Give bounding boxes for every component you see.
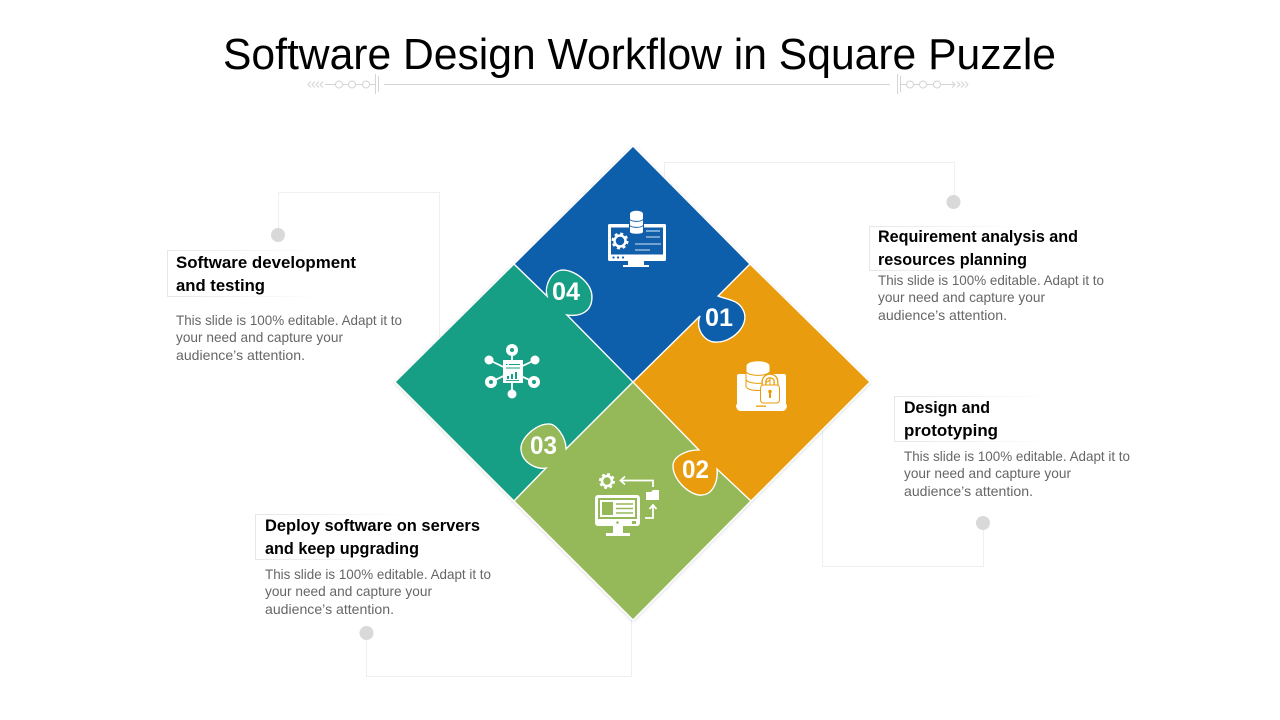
text block: design and prototyping — [894, 396, 1130, 499]
icon: monitor with database and gear — [608, 210, 666, 267]
heading: Software development — [176, 253, 356, 272]
text block: requirement analysis and resources planning — [870, 226, 1104, 323]
icon: document hub network — [484, 344, 540, 398]
icon: laptop with database and lock — [736, 361, 787, 411]
title: Software Design Workflow in Square Puzzle — [223, 30, 1056, 79]
body: This slide is 100% editable. Adapt it to — [265, 566, 491, 582]
puzzle piece: olive — [514, 382, 751, 620]
text block: deploy software on servers and keep upgrading — [256, 514, 491, 617]
heading line 2: and testing — [176, 276, 265, 295]
number 03: 03 — [530, 432, 557, 460]
square puzzle — [395, 146, 870, 620]
puzzle piece: blue — [514, 146, 750, 382]
title ornament — [308, 74, 968, 94]
heading: Design and — [904, 398, 990, 417]
body line 2: your need and capture your — [265, 583, 432, 599]
body line 2: your need and capture your — [904, 465, 1071, 481]
number 01: 01 — [705, 304, 733, 332]
connector: deploy software — [360, 620, 632, 676]
body: This slide is 100% editable. Adapt it to — [176, 312, 402, 328]
body line 2: your need and capture your — [878, 289, 1045, 305]
body line 3: audience’s attention. — [904, 483, 1033, 499]
connector: requirement analysis — [664, 162, 960, 209]
connector: software development — [271, 192, 440, 345]
text block: software development and testing — [168, 250, 402, 363]
body line 2: your need and capture your — [176, 329, 343, 345]
body: This slide is 100% editable. Adapt it to — [878, 272, 1104, 288]
number 04: 04 — [552, 278, 580, 306]
heading: Deploy software on servers — [265, 516, 480, 535]
body line 3: audience’s attention. — [878, 307, 1007, 323]
heading: Requirement analysis and — [878, 227, 1078, 246]
connector: design and prototyping — [822, 430, 990, 566]
puzzle piece: orange — [633, 264, 870, 501]
number 02: 02 — [682, 456, 709, 484]
puzzle piece: green — [395, 264, 633, 501]
body line 3: audience’s attention. — [265, 601, 394, 617]
body line 3: audience’s attention. — [176, 347, 305, 363]
body: This slide is 100% editable. Adapt it to — [904, 448, 1130, 464]
heading line 2: resources planning — [878, 250, 1027, 269]
heading line 2: and keep upgrading — [265, 539, 419, 558]
icon: monitor with gear, folder and arrows — [595, 474, 659, 536]
heading line 2: prototyping — [904, 421, 998, 440]
